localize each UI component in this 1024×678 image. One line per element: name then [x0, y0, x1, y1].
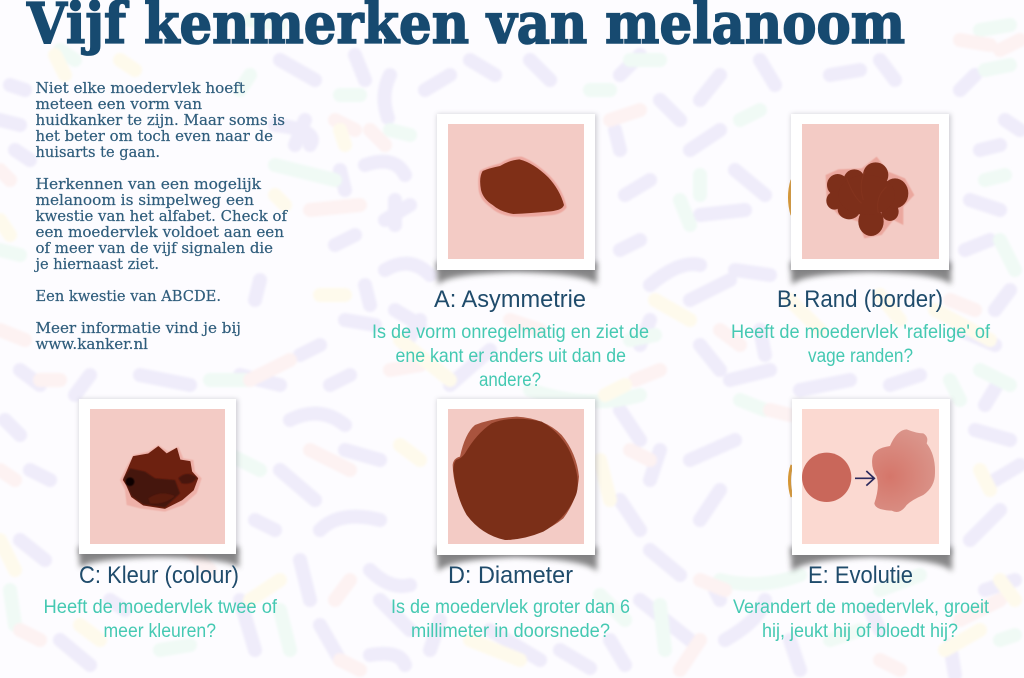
orange accent behind card B [790, 180, 792, 215]
card B description: Heeft de moedervlek 'rafelige' of [731, 322, 991, 343]
card E heading: E: Evolutie [808, 562, 913, 589]
card D description [391, 597, 630, 642]
intro text block [34, 79, 288, 353]
card E description: Verandert de moedervlek, groeit [733, 597, 990, 618]
card D description: Is de moedervlek groter dan 6 [391, 597, 630, 618]
card D heading: D: Diameter [448, 562, 573, 589]
intro text block: je hiernaast ziet. [34, 255, 159, 273]
card E description [733, 597, 990, 642]
card E: evolution [790, 399, 952, 572]
card A: asymmetry [436, 114, 597, 285]
card C description: meer kleuren? [104, 621, 216, 642]
icon: enlarged mole [872, 429, 935, 512]
intro text block: kwestie van het alfabet. Check of [36, 207, 288, 225]
icon: arrow [855, 471, 874, 486]
intro text block: Herkennen van een mogelijk [36, 175, 262, 193]
intro text block: het beter om toch even naar de [36, 127, 273, 145]
card B description [731, 322, 991, 367]
card B: border [790, 114, 951, 285]
intro text block: meteen een vorm van [36, 95, 202, 113]
card C: colour [78, 399, 239, 568]
card A description: Is de vorm onregelmatig en ziet de [372, 322, 649, 343]
intro text block: Meer informatie vind je bij [36, 319, 241, 337]
card A heading: A: Asymmetrie [434, 286, 586, 313]
card D: diameter [436, 399, 597, 572]
card E description: hij, jeukt hij of bloedt hij? [762, 621, 958, 642]
card C description: Heeft de moedervlek twee of [44, 597, 278, 618]
card D description: millimeter in doorsnede? [411, 621, 610, 642]
intro text block: melanoom is simpelweg een [36, 191, 254, 209]
card C heading: C: Kleur (colour) [79, 562, 239, 589]
card B description: vage randen? [808, 346, 913, 367]
card A description: ene kant er anders uit dan de [396, 346, 626, 367]
intro text block: huidkanker te zijn. Maar soms is [36, 111, 285, 129]
card A description [372, 322, 649, 391]
intro text block: huisarts te gaan. [36, 143, 160, 161]
card B heading: B: Rand (border) [777, 286, 943, 313]
intro text block: Een kwestie van ABCDE. [36, 287, 221, 305]
orange accent behind card E [790, 465, 792, 497]
intro text block: een moedervlek voldoet aan een [36, 223, 284, 241]
intro text block: www.kanker.nl [36, 335, 148, 353]
card A description: andere? [479, 370, 541, 391]
intro text block: of meer van de vijf signalen die [36, 239, 273, 257]
card C description [44, 597, 278, 642]
icon: small round mole [802, 453, 851, 502]
intro text block: Niet elke moedervlek hoeft [36, 79, 245, 97]
